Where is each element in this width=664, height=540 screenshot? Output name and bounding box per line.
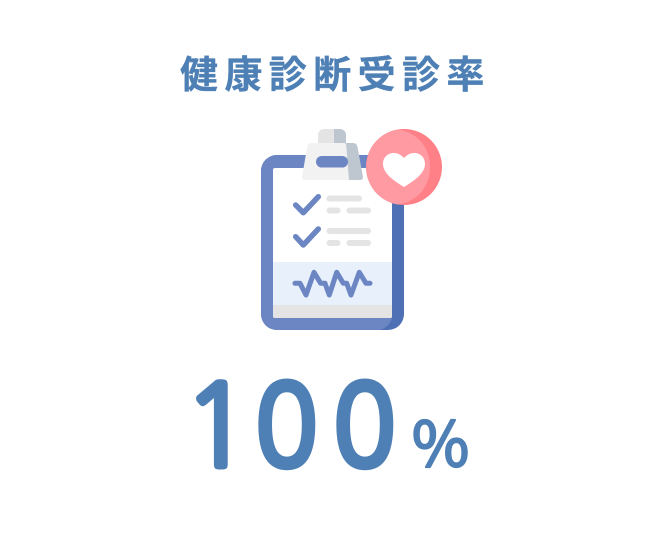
icon: clipboard with heart	[261, 129, 442, 330]
percentage value: 0	[255, 369, 318, 483]
percentage value: %	[412, 394, 469, 484]
percentage value	[183, 369, 469, 484]
paper sheet	[273, 168, 392, 318]
pulse line	[295, 272, 370, 295]
checklist	[296, 196, 371, 246]
percentage value: 1	[183, 370, 251, 483]
clip	[302, 129, 363, 180]
heart badge	[366, 129, 442, 205]
percentage value: 0	[333, 369, 396, 483]
title: 健康診断受診率	[180, 44, 491, 99]
clipboard board	[261, 155, 404, 330]
